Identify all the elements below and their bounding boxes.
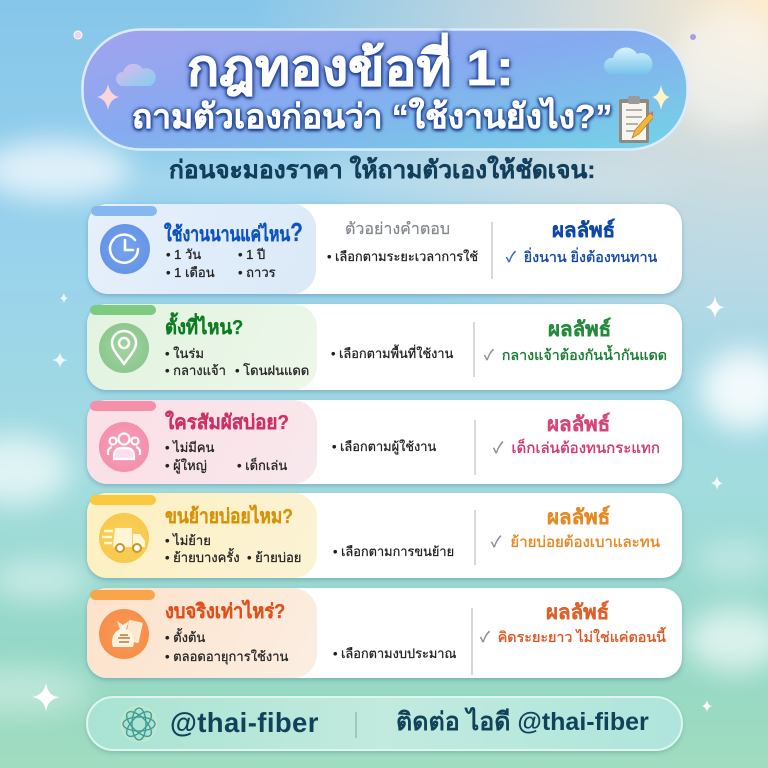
footer contact: ติดต่อ ไอดี @thai-fiber xyxy=(396,708,649,736)
example heading: ตัวอย่างคำตอบ xyxy=(345,221,450,238)
result heading 5: ผลลัพธ์ xyxy=(546,601,609,624)
result text 1: ✓ ยิ่งนาน ยิ่งต้องทนทาน xyxy=(506,250,657,266)
title banner xyxy=(81,28,689,151)
icon: map pin xyxy=(99,323,149,373)
panel: card 4 moving xyxy=(87,493,682,578)
icon: clock xyxy=(100,224,150,274)
left panel 1: • ถาวร xyxy=(238,265,276,280)
question 1: ใช้งานนานแค่ไหน? xyxy=(164,217,303,247)
tab 1 xyxy=(91,206,157,216)
left panel 1 xyxy=(88,204,316,294)
left panel 3: • ผู้ใหญ่ xyxy=(165,458,207,473)
result heading 1: ผลลัพธ์ xyxy=(552,219,615,242)
icon: pink sparkle xyxy=(97,84,119,110)
left panel 1: • 1 ปี xyxy=(238,247,265,262)
panel: card 2 location xyxy=(87,304,682,390)
result text 4: ✓ ย้ายบ่อยต้องเบาและทน xyxy=(491,534,660,551)
question 4: ขนย้ายบ่อยไหม? xyxy=(165,506,293,528)
result text 3: ✓ เด็กเล่นต้องทนกระแทก xyxy=(493,440,660,457)
icon: delivery truck xyxy=(99,513,149,563)
example answer 5: • เลือกตามงบประมาณ xyxy=(333,646,456,661)
question 3: ใครสัมผัสบ่อย? xyxy=(165,412,289,434)
example answer 4: • เลือกตามการขนย้าย xyxy=(333,544,454,559)
icon: people xyxy=(99,422,149,472)
icon: lilac cloud xyxy=(116,64,156,86)
left panel 4 xyxy=(87,493,317,578)
tab 5 xyxy=(90,590,155,600)
result heading 2: ผลลัพธ์ xyxy=(548,318,611,341)
title line 2: ถามตัวเองก่อนว่า “ใช้งานยังไง?” xyxy=(132,99,612,136)
options 2: • ในร่ม xyxy=(165,346,204,361)
subtitle: ก่อนจะมองราคา ให้ถามตัวเองให้ชัดเจน: xyxy=(169,157,595,184)
footer handle: @thai-fiber xyxy=(170,707,319,738)
left panel 2 xyxy=(87,304,317,390)
result heading 4: ผลลัพธ์ xyxy=(547,506,610,529)
options 4: • ไม่ย้าย xyxy=(165,533,211,548)
question 2: ตั้งที่ไหน? xyxy=(165,317,243,339)
left panel 2: • โดนฝนแดด xyxy=(235,363,309,378)
example answer 1: • เลือกตามระยะเวลาการใช้ xyxy=(327,249,478,264)
left panel 2: • กลางแจ้า xyxy=(165,363,226,378)
icon: thai-fiber logo xyxy=(120,706,157,742)
result text 2: ✓ กลางแจ้าต้องกันน้ำกันแดด xyxy=(484,348,667,364)
tab 3 xyxy=(90,401,156,411)
left panel 5: • ตลอดอายุการใช้งาน xyxy=(165,649,288,664)
left panel 4: • ย้ายบ่อย xyxy=(247,550,301,565)
left panel 3 xyxy=(87,400,317,484)
title line 1: กฎทองข้อที่ 1: xyxy=(187,40,514,96)
footer bar xyxy=(86,696,683,751)
panel: card 5 budget xyxy=(87,588,682,678)
panel: card 1 duration xyxy=(88,204,682,294)
options 3: • ไม่มีคน xyxy=(165,440,214,455)
icon: money bag xyxy=(99,609,149,659)
left panel 4: • ย้ายบางครั้ง xyxy=(165,550,240,565)
example answer 2: • เลือกตามพื้นที่ใช้งาน xyxy=(331,346,453,361)
panel: card 3 contact xyxy=(87,400,682,484)
options 1: • 1 วัน xyxy=(166,247,201,262)
icon: white sparkle xyxy=(652,85,670,110)
left panel 1: • 1 เดือน xyxy=(166,265,215,280)
left panel 3: • เด็กเล่น xyxy=(237,458,287,473)
result heading 3: ผลลัพธ์ xyxy=(547,413,610,436)
example answer 3: • เลือกตามผู้ใช้งาน xyxy=(332,439,436,454)
result text 5: ✓ คิดระยะยาว ไม่ใช่แค่ตอนนี้ xyxy=(480,630,666,646)
icon: blue cloud xyxy=(604,48,652,74)
options 5: • ตั้งต้น xyxy=(165,630,205,645)
icon: clipboard and pencil xyxy=(619,96,653,143)
tab 4 xyxy=(90,495,156,505)
question 5: งบจริงเท่าไหร่? xyxy=(165,601,285,623)
tab 2 xyxy=(90,305,156,315)
left panel 5 xyxy=(87,588,317,678)
